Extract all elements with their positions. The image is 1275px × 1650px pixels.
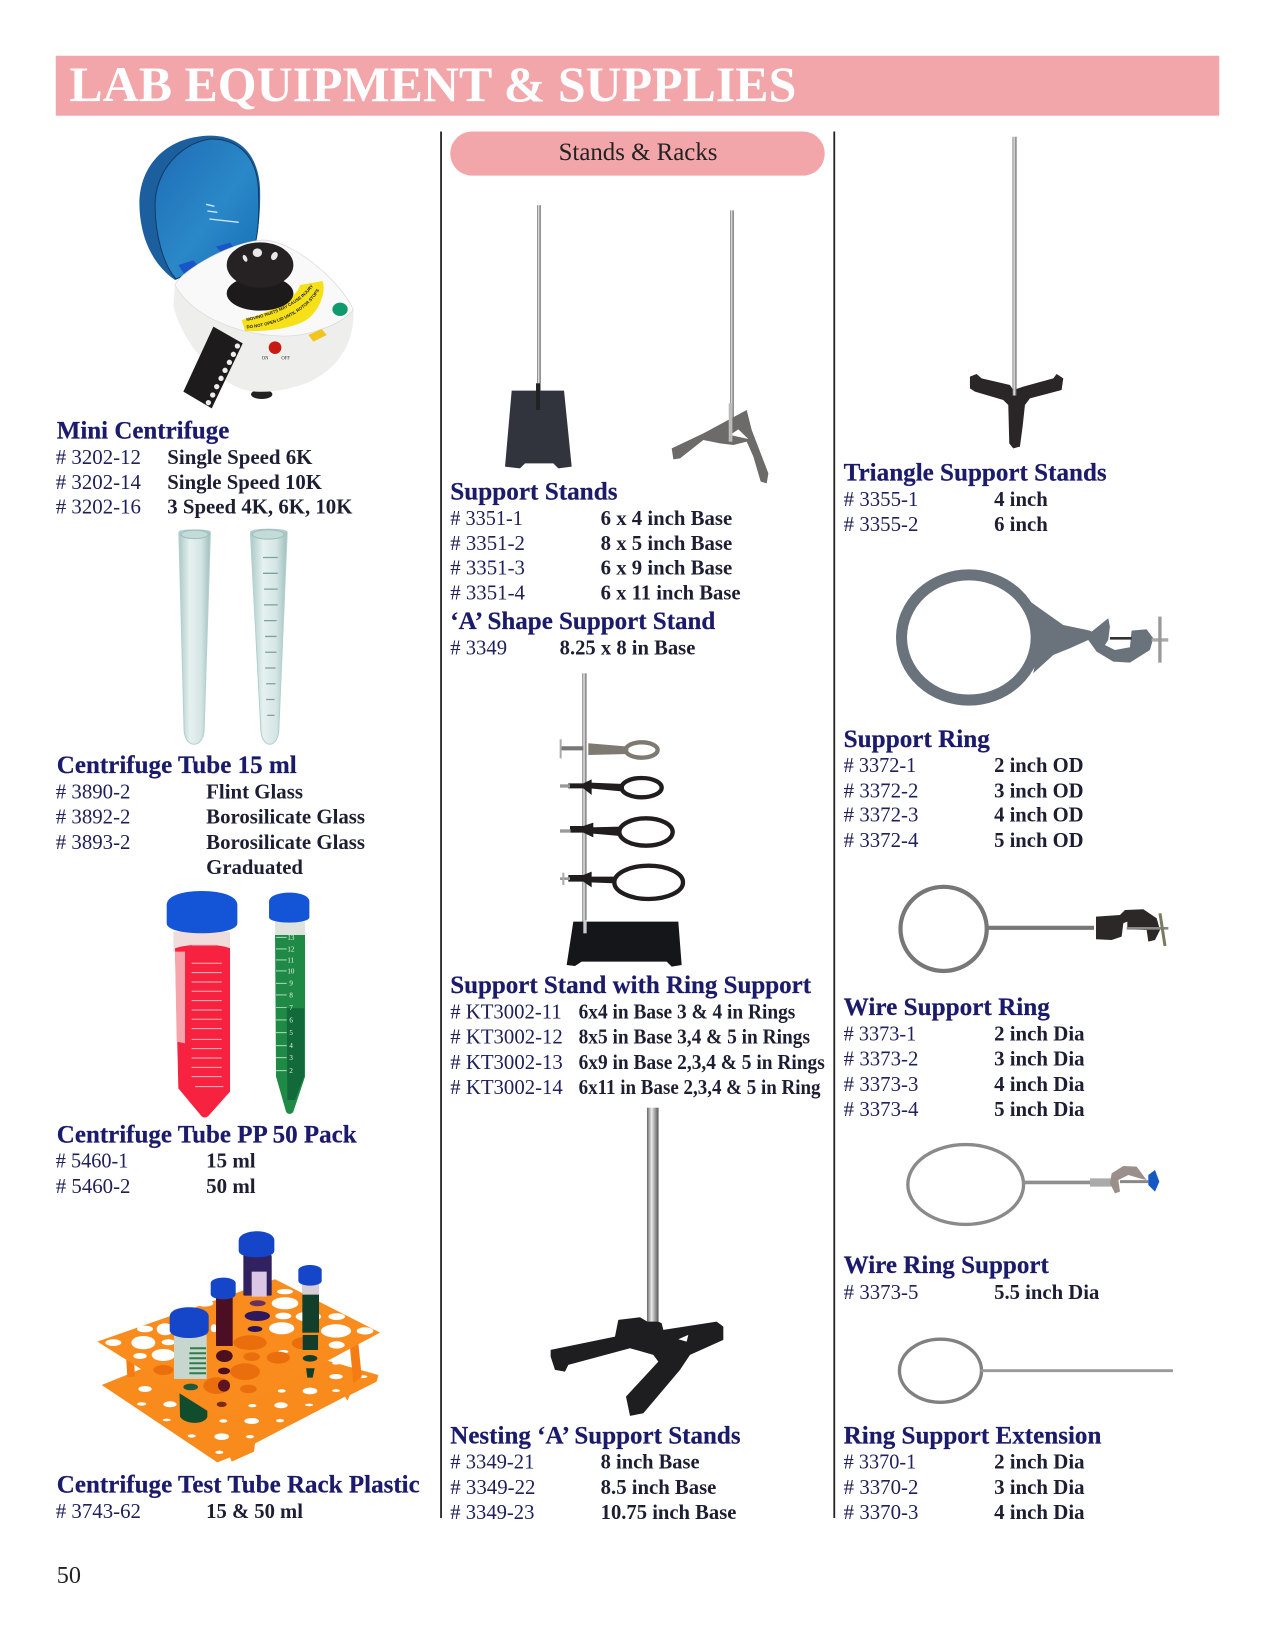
icon: triangle support stand [970,137,1063,448]
section pill: stands and racks [450,131,825,176]
product list: support stands [450,508,741,605]
product list: ring support extension: # 3370-3 [844,1502,918,1524]
product list: centrifuge tube 15 ml [56,781,365,879]
product list: ring support extension: # 3370-2 [844,1477,918,1499]
heading: support ring: Support Ring [844,726,990,753]
icon: plastic centrifuge tubes: 13 [287,934,295,942]
product list: test tube rack: # 3743-62 [56,1501,141,1523]
icon: wire support ring [900,887,1168,971]
product list: support stands: # 3351-3 [450,557,525,579]
product list: wire support ring: 5 inch Dia [994,1099,1085,1121]
product list: support stands: 6 x 11 inch Base [601,583,741,605]
icon: plastic centrifuge tubes: 4 [289,1042,293,1050]
product list: support ring: # 3372-2 [844,780,918,802]
icon: plastic centrifuge tubes: 11 [287,956,295,964]
product list: centrifuge tube pp: # 5460-2 [56,1176,130,1198]
product list: support stands: 8 x 5 inch Base [601,533,732,555]
product list: nesting a support stands: 10.75 inch Base [601,1502,736,1524]
product list: a shape support stand [450,637,695,659]
product list: support ring: 3 inch OD [994,780,1084,802]
heading: centrifuge tube 15 ml: Centrifuge Tube 15 ml [57,752,297,779]
product list: triangle support stands [844,489,1048,536]
column divider left [440,131,442,1518]
heading: centrifuge tube pp: Centrifuge Tube PP 50 Pack [57,1121,357,1148]
product list: wire support ring: # 3373-2 [844,1049,918,1071]
product list: support stands: # 3351-4 [450,583,525,605]
icon: plastic centrifuge tubes: 6 [289,1016,293,1024]
product list: support ring: 2 inch OD [994,755,1084,777]
heading: a shape support stand: ‘A’ Shape Support Stand [450,608,715,635]
product list: nesting a support stands: 8 inch Base [601,1452,700,1474]
product list: support stand with ring support [450,1001,825,1099]
title banner [56,56,1219,116]
icon: orange test tube rack [97,1231,380,1462]
icon: support ring [902,575,1168,700]
product list: nesting a support stands: # 3349-21 [450,1452,534,1474]
product list: centrifuge tube 15 ml: Borosilicate Glass [206,807,365,829]
product list: centrifuge tube pp: 15 ml [206,1151,256,1173]
product list: centrifuge tube 15 ml: Graduated [206,857,304,879]
product list: ring support extension: 3 inch Dia [994,1477,1085,1499]
product list: mini centrifuge: # 3202-16 [56,496,141,518]
product list: centrifuge tube 15 ml: # 3892-2 [56,807,130,829]
product list: centrifuge tube 15 ml: # 3893-2 [56,832,130,854]
product list: a shape support stand: # 3349 [450,637,507,659]
product list: mini centrifuge: # 3202-14 [56,472,141,494]
product list: wire support ring: # 3373-4 [844,1099,918,1121]
product list: mini centrifuge: Single Speed 10K [167,472,322,494]
product list: centrifuge tube 15 ml: Borosilicate Glass [206,832,365,854]
product list: test tube rack: 15 & 50 ml [206,1501,303,1523]
product list: triangle support stands: 4 inch [994,489,1048,511]
product list: support stand with ring support: 8x5 in Base 3,4 & 5 in Rings [579,1027,810,1049]
product list: support ring: 4 inch OD [994,805,1084,827]
product list: mini centrifuge: Single Speed 6K [167,447,312,469]
product list: support stand with ring support: 6x4 in Base 3 & 4 in Rings [579,1001,795,1023]
product list: wire support ring: 4 inch Dia [994,1074,1085,1096]
heading: triangle support stands: Triangle Support Stands [844,460,1107,487]
icon: plastic centrifuge tubes: 12 [287,945,295,953]
product list: triangle support stands: 6 inch [994,514,1048,536]
icon: nesting a support stand [551,1108,723,1416]
product list: mini centrifuge: 3 Speed 4K, 6K, 10K [167,496,352,518]
panel: left column [56,136,420,1523]
product list: support stand with ring support: # KT3002-13 [450,1052,563,1074]
heading: support stand with ring support: Support Stand with Ring Support [450,972,812,999]
product list: nesting a support stands: 8.5 inch Base [601,1477,716,1499]
icon: plastic centrifuge tubes: 10 [287,967,295,975]
product list: a shape support stand: 8.25 x 8 in Base [560,637,695,659]
heading: mini centrifuge: Mini Centrifuge [57,418,229,445]
product list: centrifuge tube 15 ml: # 3890-2 [56,781,130,803]
icon: plastic centrifuge tubes: 7 [289,1004,293,1012]
product list: support stand with ring support: # KT3002-14 [450,1077,563,1099]
product list: ring support extension [844,1452,1085,1524]
title: LAB EQUIPMENT & SUPPLIES [69,56,796,112]
product list: support ring: # 3372-3 [844,805,918,827]
product list: ring support extension: # 3370-1 [844,1452,916,1474]
icon: plastic centrifuge tubes [167,891,309,1117]
icon: plastic centrifuge tubes: 3 [289,1054,293,1062]
product list: support ring [844,755,1084,852]
icon: plastic centrifuge tubes: 9 [289,980,293,988]
product list: wire support ring: 2 inch Dia [994,1023,1085,1045]
section pill: stands and racks: Stands & Racks [559,139,717,166]
product list: centrifuge tube 15 ml: Flint Glass [206,781,303,803]
product list: support stands: 6 x 4 inch Base [601,508,732,530]
product list: test tube rack [56,1501,303,1523]
icon: mini centrifuge [139,136,354,408]
icon: ring support extension [899,1339,1173,1402]
panel: right column [844,137,1173,1524]
icon: mini centrifuge: ON [262,357,269,362]
heading: wire ring support: Wire Ring Support [844,1252,1050,1279]
product list: wire support ring: # 3373-1 [844,1023,916,1045]
icon: support stand with rings [560,673,683,967]
heading: support stands: Support Stands [450,479,618,506]
product list: support stand with ring support: 6x9 in Base 2,3,4 & 5 in Rings [579,1052,825,1074]
product list: support ring: # 3372-4 [844,830,918,852]
icon: glass centrifuge tubes [179,529,287,744]
icon: mini centrifuge: MOVING PARTS MAY CAUSE INJURY [246,284,313,321]
panel: middle column [450,205,825,1524]
product list: nesting a support stands: # 3349-22 [450,1477,535,1499]
product list: mini centrifuge [56,447,352,518]
product list: wire support ring: # 3373-3 [844,1074,918,1096]
product list: support stands: # 3351-1 [450,508,523,530]
product list: mini centrifuge: # 3202-12 [56,447,141,469]
icon: plastic centrifuge tubes: 2 [289,1067,293,1075]
icon: a-shape support stand [672,210,768,483]
icon: plastic centrifuge tubes: 8 [289,991,293,999]
product list: nesting a support stands: # 3349-23 [450,1502,534,1524]
product list: ring support extension: 4 inch Dia [994,1502,1085,1524]
product list: ring support extension: 2 inch Dia [994,1452,1085,1474]
product list: support stand with ring support: # KT3002-11 [450,1001,562,1023]
icon: mini centrifuge: DO NOT OPEN LID UNTIL ROTOR STOPS [246,289,319,328]
icon: wire ring support [908,1145,1159,1224]
product list: support stands: # 3351-2 [450,533,525,555]
product list: triangle support stands: # 3355-1 [844,489,918,511]
product list: support ring: 5 inch OD [994,830,1084,852]
heading: test tube rack: Centrifuge Test Tube Rack Plastic [57,1472,420,1499]
icon: mini centrifuge: OFF [281,357,290,362]
product list: support ring: # 3372-1 [844,755,916,777]
product list: wire support ring [844,1023,1085,1121]
icon: rectangular support stand [505,205,572,468]
product list: wire ring support: # 3373-5 [844,1282,918,1304]
product list: nesting a support stands [450,1452,736,1524]
product list: centrifuge tube pp: 50 ml [206,1176,256,1198]
page number: 50 [57,1562,81,1589]
product list: support stand with ring support: 6x11 in Base 2,3,4 & 5 in Ring [579,1077,821,1099]
column divider right [833,131,835,1518]
product list: centrifuge tube pp [56,1151,256,1198]
product list: triangle support stands: # 3355-2 [844,514,918,536]
product list: wire ring support: 5.5 inch Dia [994,1282,1099,1304]
product list: wire support ring: 3 inch Dia [994,1049,1085,1071]
product list: wire ring support [844,1282,1099,1304]
icon: plastic centrifuge tubes: 5 [289,1029,293,1037]
product list: support stand with ring support: # KT3002-12 [450,1027,563,1049]
product list: support stands: 6 x 9 inch Base [601,557,732,579]
product list: centrifuge tube pp: # 5460-1 [56,1151,128,1173]
heading: wire support ring: Wire Support Ring [844,994,1050,1021]
heading: ring support extension: Ring Support Extension [844,1422,1102,1449]
heading: nesting a support stands: Nesting ‘A’ Support Stands [450,1422,741,1449]
